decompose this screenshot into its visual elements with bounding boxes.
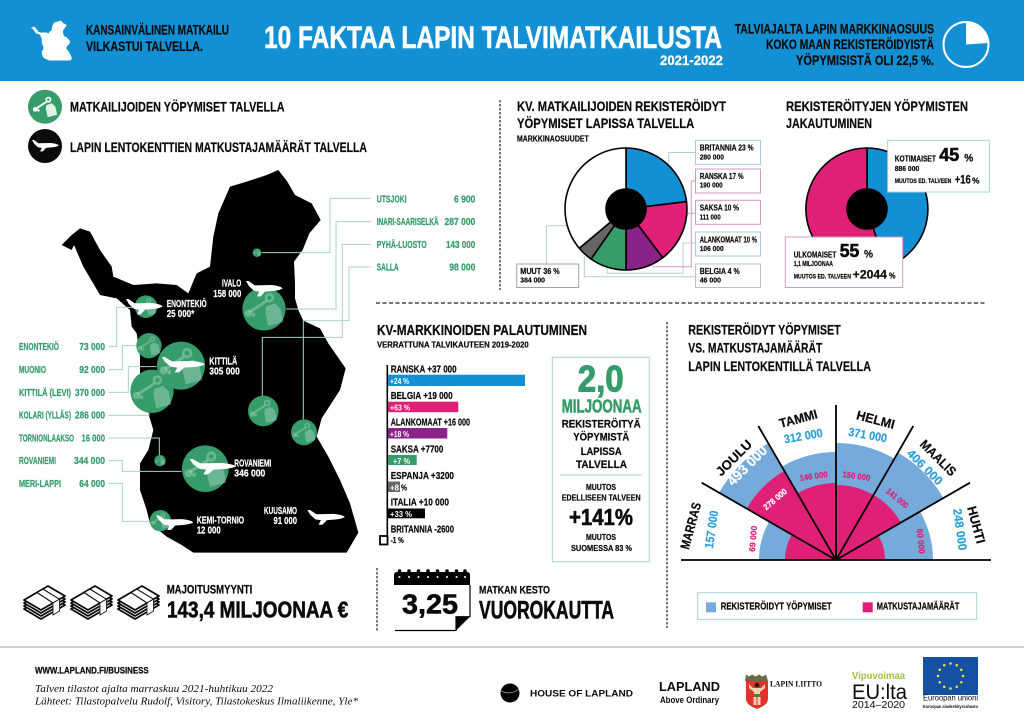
airport labels: 12 000: [197, 525, 221, 536]
heading: VERRATTUNA TALVIKAUTEEN 2019-2020: [377, 340, 529, 349]
legend: map symbols: [28, 90, 367, 163]
callout: domestic: MUUTOS ED. TALVEEN: [895, 178, 952, 185]
rose chart: 141 000: [884, 486, 911, 511]
logo: European Union flag: Euroopan aluekehitysrahasto: [923, 704, 978, 709]
destination labels right: UTSJOKI: [377, 194, 407, 206]
trip length text: MATKAN KESTO: [479, 584, 550, 596]
callout: 2.0 million nights: REKISTERÖITYÄ: [562, 418, 641, 431]
header fact left: VILKASTUI TALVELLA.: [86, 38, 203, 54]
map panel: [19, 170, 476, 553]
callout: 2.0 million nights: YÖPYMISTÄ: [573, 431, 629, 444]
panel: international market shares: [517, 98, 760, 288]
bar: Alankomaat: +18 %: [390, 430, 409, 439]
airport labels: IVALO: [222, 279, 242, 290]
bar: Britannia: BRITANNIA -2600: [391, 524, 454, 535]
callout: foreign: [785, 237, 903, 288]
bar: Espanja: ESPANJA +3200: [391, 471, 454, 482]
callout: foreign: 1,1 MILJOONAA: [794, 261, 833, 268]
panel: domestic vs foreign nights: [785, 98, 989, 288]
label: Alankomaat: 106 000: [700, 244, 724, 253]
logo: House of Lapland: HOUSE OF LAPLAND: [530, 689, 633, 700]
header fact right: KOKO MAAN REKISTERÖIDYISTÄ: [766, 36, 934, 52]
label: Muut: MUUT 36 %: [520, 266, 560, 276]
sales text: MAJOITUSMYYNTI: [167, 584, 252, 596]
callout: foreign: 55: [840, 241, 859, 261]
chart legend: REKISTERÖIDYT YÖPYMISET: [721, 601, 832, 612]
bar: Italia: [388, 498, 449, 519]
rose chart: MARRAS: [677, 500, 704, 551]
rose chart: [677, 405, 991, 560]
heading: [786, 98, 968, 131]
destination labels left: 344 000: [74, 456, 105, 467]
callout: domestic: 886 000: [895, 166, 919, 173]
destination labels left: 370 000: [75, 388, 105, 399]
airport labels: 305 000: [209, 367, 240, 378]
callout: 2.0 million nights: MILJOONAA: [562, 397, 642, 417]
heading: KV. MATKAILIJOIDEN REKISTERÖIDYT: [517, 98, 726, 114]
bar: Espanja: +8: [390, 484, 400, 492]
footer sources: Lähteet: Tilastopalvelu Rudolf, Visitory, Tilastokeskus Ilmaliikenne, Yle*: [34, 696, 359, 707]
destination labels left: ENONTEKIÖ: [19, 342, 59, 353]
logo: Vipuvoimaa EU:lta: Vipuvoimaa: [852, 671, 905, 682]
label: Saksa: 111 000: [700, 213, 721, 222]
destination labels right: 98 000: [449, 262, 476, 274]
label: Saksa: SAKSA 10 %: [700, 202, 739, 212]
bar: Britannia: -1 %: [391, 536, 404, 545]
logo: Lapland Above Ordinary: LAPLAND: [659, 679, 720, 694]
heading: YÖPYMISET LAPISSA TALVELLA: [517, 115, 694, 131]
label: Alankomaat: ALANKOMAAT 10 %: [700, 234, 757, 244]
logo: European Union flag: Euroopan unioni: [923, 693, 978, 703]
airport labels: 25 000*: [167, 309, 194, 320]
callout: foreign: MUUTOS ED. TALVEEN: [794, 273, 851, 280]
footer sources: [34, 665, 359, 707]
callout: 2.0 million nights: EDELLISEEN TALVEEN: [562, 493, 641, 503]
rose chart: 150 000: [842, 469, 871, 483]
callout: foreign: +2044: [853, 270, 888, 282]
rose chart: 278 000: [761, 486, 789, 512]
callout: domestic: %: [972, 176, 980, 186]
airport labels: ROVANIEMI: [234, 458, 271, 469]
logo: Vipuvoimaa EU:lta: [852, 671, 907, 711]
heading: LAPIN LENTOKENTILLÄ TALVELLA: [688, 358, 871, 374]
label: Britannia: [696, 140, 760, 164]
pie chart: domestic and foreign: [806, 148, 928, 270]
bar: Saksa: +7 %: [393, 457, 410, 466]
destination labels left: 64 000: [79, 479, 105, 490]
header fact left: KANSAINVÄLINEN MATKAILU: [86, 21, 229, 37]
logo: House of Lapland: [500, 684, 633, 702]
bar: Belgia: BELGIA +19 000: [391, 391, 453, 402]
destination labels left: MUONIO: [19, 365, 46, 376]
rose chart: 69 000: [747, 525, 759, 552]
callout: 2.0 million nights: +141%: [569, 504, 633, 530]
trip length text: [479, 584, 614, 624]
destination labels left: 286 000: [75, 410, 105, 422]
footer sources: WWW.LAPLAND.FI/BUSINESS: [35, 665, 149, 675]
heading: [517, 98, 726, 143]
rose chart: JOULU: [713, 437, 755, 479]
panel: recovery of international markets: [377, 323, 649, 562]
label: Belgia: BELGIA 4 %: [700, 266, 740, 276]
logo: Lapland Above Ordinary: Above Ordinary: [660, 695, 719, 705]
destination labels right: 287 000: [444, 217, 476, 228]
callout: domestic: [888, 140, 989, 192]
label: Saksa: [696, 200, 760, 224]
heading: [688, 321, 871, 374]
icon: money stacks: [24, 586, 159, 619]
rose chart: 493 000: [724, 442, 770, 489]
rose chart: 312 000: [783, 426, 824, 446]
label: Britannia: 280 000: [700, 153, 724, 162]
header fact right: [735, 20, 934, 68]
title: [264, 19, 723, 68]
sales text: [167, 584, 348, 623]
bar: Espanja: %: [401, 484, 407, 492]
pie chart: market shares: [565, 148, 687, 270]
icon: calendar: [394, 569, 470, 630]
icon: airplane: [28, 129, 62, 163]
heading: JAKAUTUMINEN: [786, 115, 872, 131]
airport labels: ENONTEKIÖ: [167, 299, 207, 310]
callout: 2.0 million nights: 2,0: [578, 359, 624, 400]
callout: domestic: 45: [939, 145, 959, 165]
destination labels right: SALLA: [377, 262, 399, 274]
heading: KV-MARKKINOIDEN PALAUTUMINEN: [377, 323, 587, 339]
bar: Ranska: [388, 364, 525, 386]
rose chart: 146 000: [799, 469, 828, 483]
callout: 2.0 million nights: TALVELLA: [576, 459, 627, 471]
logo: Lapin liitto: [745, 674, 822, 709]
logo: European Union flag: [923, 657, 978, 709]
label: Ranska: [696, 169, 760, 193]
chart legend: [698, 593, 977, 619]
destination labels right: 143 000: [446, 240, 476, 251]
destination labels left: ROVANIEMI: [19, 456, 56, 467]
bar chart: [380, 364, 525, 545]
callout: 2.0 million nights: LAPISSA: [581, 446, 622, 458]
rose chart: MAALIS: [917, 437, 960, 479]
chart legend: MATKUSTAJAMÄÄRÄT: [877, 601, 959, 612]
bar: Ranska: +24 %: [390, 377, 409, 386]
destination labels left: 92 000: [79, 365, 105, 376]
destination labels right: 6 900: [454, 194, 476, 206]
bar: Belgia: [388, 391, 458, 412]
logo: Vipuvoimaa EU:lta: 2014–2020: [852, 700, 905, 711]
icon: calendar: 3,25: [402, 588, 458, 619]
sales text: 143,4 MILJOONAA €: [167, 597, 348, 623]
destination labels right: [377, 194, 476, 274]
bar: Alankomaat: ALANKOMAAT +16 000: [391, 418, 470, 429]
bar: Espanja: [388, 471, 454, 492]
label: Muut: 384 000: [520, 276, 545, 285]
bar: Italia: +33 %: [390, 510, 412, 519]
fact: trip length: [394, 569, 614, 630]
label: Muut: [517, 264, 579, 288]
label: Alankomaat: [696, 232, 760, 256]
bar: Ranska: RANSKA +37 000: [391, 364, 457, 375]
airport labels: 91 000: [274, 516, 297, 527]
bar: Saksa: [388, 444, 444, 466]
label: Belgia: [696, 264, 760, 288]
destination labels left: KITTILÄ (LEVI): [19, 388, 71, 399]
bar: Italia: ITALIA +10 000: [391, 498, 449, 509]
destination labels left: TORNIONLAAKSO: [19, 434, 74, 444]
destination labels left: KOLARI (YLLÄS): [19, 410, 71, 422]
rose chart: HELMI: [855, 407, 896, 432]
callout: foreign: %: [889, 270, 896, 280]
heading: REKISTERÖIDYT YÖPYMISET: [688, 321, 841, 337]
legend text: nights: MATKAILIJOIDEN YÖPYMISET TALVELLA: [70, 99, 284, 115]
bar: Britannia: [380, 524, 454, 545]
callout: 2.0 million nights: MUUTOS: [586, 482, 616, 492]
destination labels left: 73 000: [79, 342, 105, 353]
callout: 2.0 million nights: MUUTOS: [586, 532, 616, 542]
bar: Alankomaat: [388, 418, 470, 439]
label: Ranska: 190 000: [700, 181, 723, 190]
airport labels: [167, 279, 297, 536]
logo: Vipuvoimaa EU:lta: EU:lta: [852, 681, 907, 704]
logo: Lapin liitto: LAPIN LIITTO: [770, 679, 822, 689]
title: 2021-2022: [660, 53, 723, 68]
heading: MARKKINAOSUUDET: [517, 133, 589, 143]
callout: domestic: %: [964, 153, 974, 165]
logo: Lapland Above Ordinary: [659, 679, 720, 705]
destination labels left: 16 000: [82, 434, 105, 444]
label: Belgia: 46 000: [700, 276, 721, 285]
header band: [0, 0, 1024, 81]
rose chart: 248 000: [950, 508, 970, 552]
callout: domestic: KOTIMAISET: [895, 155, 936, 164]
header fact right: YÖPYMISISTÄ OLI 22,5 %.: [796, 52, 934, 68]
destination labels right: INARI-SAARISELKÄ: [377, 217, 439, 228]
legend text: airports: LAPIN LENTOKENTTIEN MATKUSTAJAMÄÄRÄT TALVELLA: [70, 139, 367, 155]
label: Ranska: RANSKA 17 %: [700, 171, 744, 181]
heading: REKISTERÖITYJEN YÖPYMISTEN: [786, 98, 968, 114]
icon: accommodation key: [28, 90, 62, 124]
icon: Lapland silhouette: [31, 21, 72, 61]
header fact left: [86, 21, 229, 54]
trip length text: VUOROKAUTTA: [479, 596, 614, 624]
callout: 2.0 million nights: SUOMESSA 83 %: [571, 543, 632, 553]
heading: [377, 323, 587, 349]
destination labels left: MERI-LAPPI: [19, 479, 61, 490]
header fact right: TALVIAJALTA LAPIN MARKKINAOSUUS: [735, 20, 934, 36]
callout: 2.0 million nights: [552, 357, 649, 562]
callout: domestic: +16: [955, 174, 971, 186]
destination labels left: [19, 342, 105, 490]
panel: nights vs passengers rose chart: [677, 321, 991, 619]
map of Lapland: [62, 170, 371, 553]
title: 10 FAKTAA LAPIN TALVIMATKAILUSTA: [264, 19, 722, 55]
airport labels: 158 000: [213, 289, 242, 300]
label: Britannia: BRITANNIA 23 %: [700, 142, 754, 152]
icon: share pie: [944, 22, 988, 67]
destination labels right: PYHÄ-LUOSTO: [377, 240, 427, 251]
callout: foreign: ULKOMAISET: [794, 250, 836, 259]
callout: foreign: %: [864, 248, 873, 260]
bar: Saksa: SAKSA +7700: [391, 444, 444, 455]
bar: Belgia: +63 %: [390, 404, 410, 412]
rose chart: 60 000: [915, 528, 927, 554]
airport labels: KITTILÄ: [209, 357, 237, 368]
footer sources: Talven tilastot ajalta marraskuu 2021-huhtikuu 2022: [35, 684, 274, 695]
airport labels: 346 000: [234, 468, 266, 479]
airport labels: KEMI-TORNIO: [197, 515, 244, 526]
rose chart: 406 000: [904, 446, 946, 488]
rose chart: TAMMI: [778, 406, 819, 431]
rose chart: 157 000: [702, 509, 721, 549]
rose chart: HUHTI: [964, 505, 989, 545]
heading: VS. MATKUSTAJAMÄÄRÄT: [688, 340, 823, 356]
fact: accommodation sales: [24, 584, 348, 623]
airport labels: KUUSAMO: [264, 506, 297, 517]
rose chart: 371 000: [847, 425, 888, 445]
